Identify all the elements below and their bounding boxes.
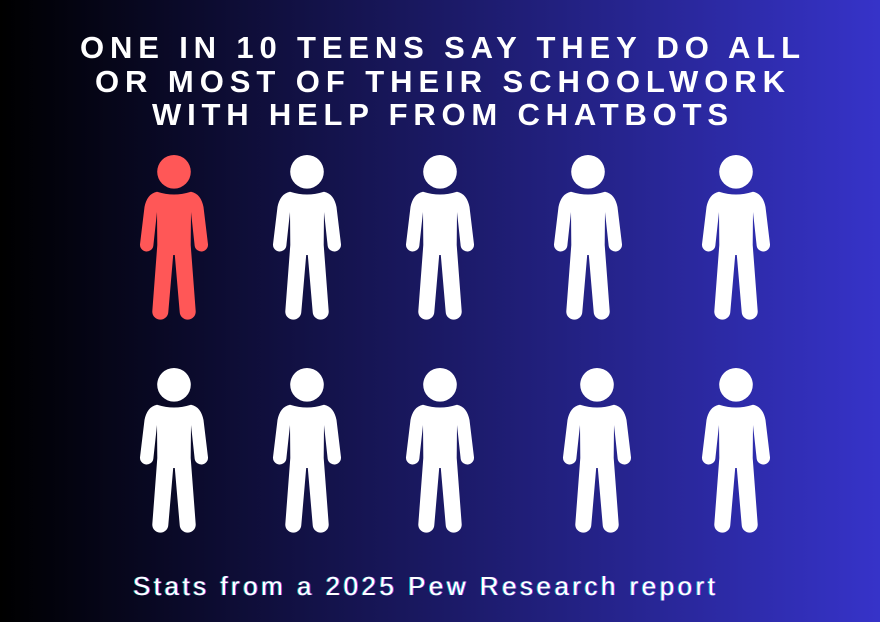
title: WITH HELP FROM CHATBOTS	[152, 97, 728, 132]
icon: person	[702, 155, 770, 320]
icon: person	[273, 155, 341, 320]
icon: person	[273, 368, 341, 533]
icon: person	[702, 368, 770, 533]
icon: person	[563, 368, 631, 533]
icon: person	[140, 368, 208, 533]
source note: Stats from a 2025 Pew Research report	[133, 571, 716, 601]
icon: person	[554, 155, 622, 320]
title	[80, 30, 800, 132]
icon: highlighted person	[140, 155, 208, 320]
title: OR MOST OF THEIR SCHOOLWORK	[95, 64, 786, 99]
icon: person	[406, 155, 474, 320]
icon: person	[406, 368, 474, 533]
title: ONE IN 10 TEENS SAY THEY DO ALL	[80, 30, 800, 65]
pictogram: 1 in 10 people highlighted	[140, 155, 770, 533]
